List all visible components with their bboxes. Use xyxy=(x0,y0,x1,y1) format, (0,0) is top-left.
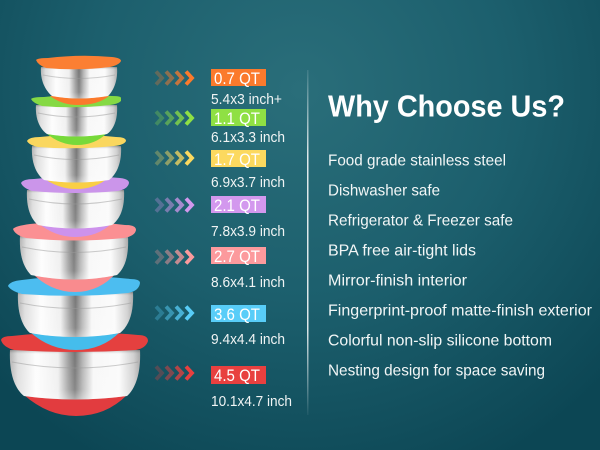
title: Why Choose Us? xyxy=(328,88,565,124)
row: 2.1 QT: 7.8x3.9 inch xyxy=(211,224,285,240)
row: 0.7 QT: 0.7 QT xyxy=(214,69,260,88)
row: 2.7 QT xyxy=(156,247,285,291)
row: 1.7 QT: 6.9x3.7 inch xyxy=(211,175,285,191)
feature list: Nesting design for space saving xyxy=(328,362,545,380)
row: 3.6 QT: 3.6 QT xyxy=(214,305,260,324)
arrows xyxy=(156,112,192,124)
bowl: 0.7 QT orange xyxy=(36,56,121,105)
feature list: Mirror-finish interior xyxy=(328,272,468,290)
row: 4.5 QT xyxy=(156,366,292,410)
feature list: Colorful non-slip silicone bottom xyxy=(328,332,552,350)
arrows xyxy=(156,72,192,84)
row: 4.5 QT: 4.5 QT xyxy=(214,366,260,385)
row: 1.1 QT: 6.1x3.3 inch xyxy=(211,130,285,146)
feature list: Refrigerator & Freezer safe xyxy=(328,212,513,230)
row: 2.7 QT: 2.7 QT xyxy=(214,247,260,266)
arrows xyxy=(156,152,192,164)
feature list: Food grade stainless steel xyxy=(328,152,506,170)
bowl: 3.6 QT blue xyxy=(8,276,140,350)
row: 2.1 QT xyxy=(156,196,285,240)
bowl stack xyxy=(1,56,148,416)
row: 3.6 QT: 9.4x4.4 inch xyxy=(211,332,285,348)
bowl: 1.7 QT yellow xyxy=(27,135,126,189)
row: 0.7 QT xyxy=(156,69,282,108)
size rows xyxy=(156,69,292,410)
row: 1.7 QT: 1.7 QT xyxy=(214,150,260,169)
row: 1.1 QT xyxy=(156,109,285,146)
row: 0.7 QT: 5.4x3 inch+ xyxy=(211,92,282,108)
row: 4.5 QT: 10.1x4.7 inch xyxy=(211,394,292,410)
row: 2.7 QT: 8.6x4.1 inch xyxy=(211,275,285,291)
bowl: 1.1 QT green xyxy=(31,95,121,145)
arrows xyxy=(156,306,192,320)
bowl: 2.7 QT pink xyxy=(13,222,136,292)
bowl: 4.5 QT red xyxy=(1,332,148,416)
row: 1.1 QT: 1.1 QT xyxy=(214,109,260,128)
feature list xyxy=(328,152,593,380)
arrows xyxy=(156,250,192,264)
feature list: Dishwasher safe xyxy=(328,182,440,200)
feature list: Fingerprint-proof matte-finish exterior xyxy=(328,302,593,320)
feature list: BPA free air-tight lids xyxy=(328,242,476,260)
arrows xyxy=(156,198,192,212)
row: 2.1 QT: 2.1 QT xyxy=(214,196,260,215)
bowl: 2.1 QT purple xyxy=(21,176,129,237)
arrows xyxy=(156,366,192,380)
row: 3.6 QT xyxy=(156,305,285,348)
row: 1.7 QT xyxy=(156,150,285,191)
